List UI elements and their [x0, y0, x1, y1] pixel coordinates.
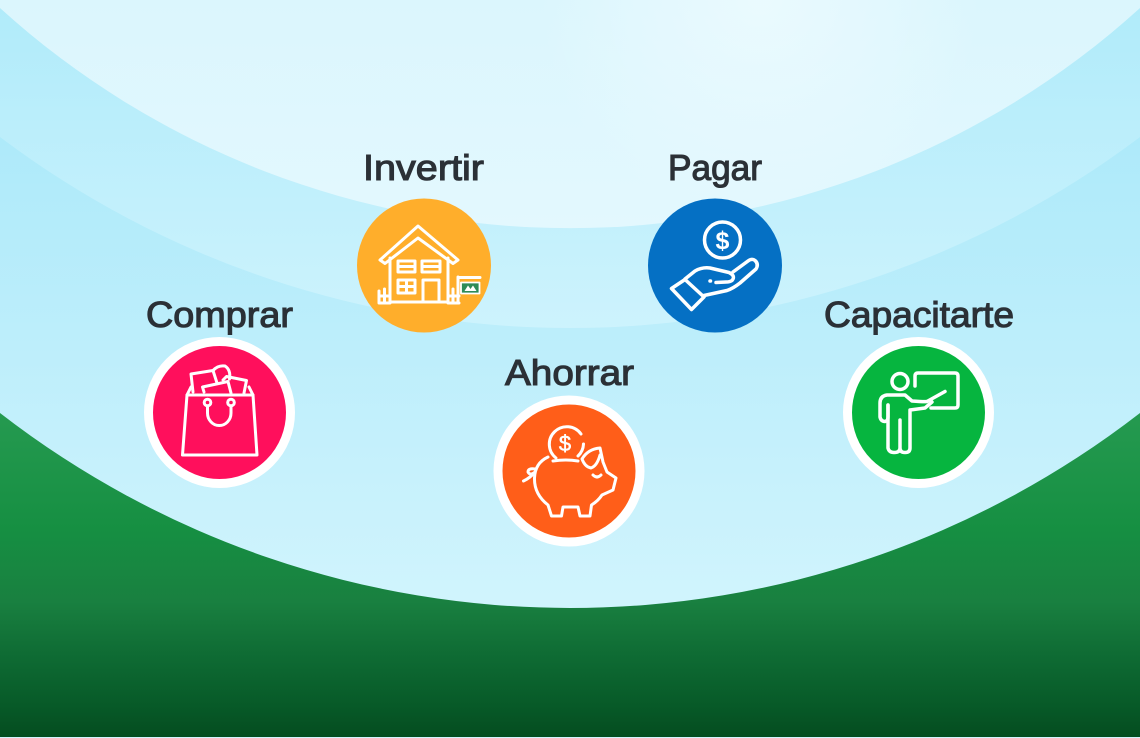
heading: Pagar: Pagar: [668, 147, 762, 188]
circle: pink with white ring: [148, 342, 290, 484]
icon: shopping bag: [182, 366, 257, 455]
heading: Invertir: Invertir: [363, 147, 484, 188]
icon: piggy bank with coin: $: [559, 431, 571, 456]
heading: Comprar: Comprar: [146, 294, 293, 335]
icon: hand with coin: [672, 222, 757, 310]
icon: hand with coin: $: [716, 227, 730, 255]
item: Invertir: [357, 147, 491, 332]
green ground: [0, 413, 1140, 737]
icon: piggy bank with coin: [524, 427, 616, 516]
circle: orange-red with white ring: [498, 400, 640, 542]
item: Comprar: [146, 294, 293, 484]
heading: Capacitarte: Capacitarte: [824, 294, 1014, 335]
circle: blue: [648, 198, 782, 332]
item: Ahorrar: [498, 352, 640, 542]
icon: teacher at board: [880, 373, 958, 452]
circle: green with white ring: [848, 342, 990, 484]
item: Pagar: [648, 147, 782, 332]
top light arc: [0, 0, 1140, 228]
circle: orange: [357, 198, 491, 332]
icon: house with sign: [379, 226, 480, 303]
item: Capacitarte: [824, 294, 1014, 484]
heading: Ahorrar: Ahorrar: [505, 352, 634, 393]
